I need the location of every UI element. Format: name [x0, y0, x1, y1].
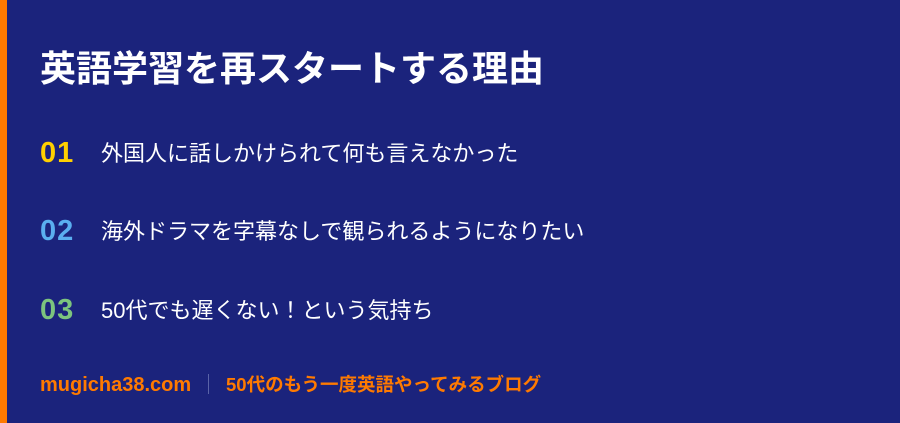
accent bar [0, 0, 7, 423]
footer: 50代のもう一度英語やってみるブログ [226, 374, 541, 395]
footer [40, 374, 541, 396]
number 01: 01 [40, 137, 74, 169]
title: 英語学習を再スタートする理由 [40, 48, 544, 89]
item 02 [40, 215, 584, 247]
text 03: 50代でも遅くない！という気持ち [101, 298, 433, 323]
text 01: 外国人に話しかけられて何も言えなかった [101, 141, 518, 166]
number 02: 02 [40, 215, 74, 247]
number 03: 03 [40, 294, 74, 326]
item 01 [40, 137, 518, 169]
text 02: 海外ドラマを字幕なしで観られるようになりたい [101, 219, 584, 244]
footer: mugicha38.com [40, 374, 191, 396]
item 03 [40, 294, 433, 326]
